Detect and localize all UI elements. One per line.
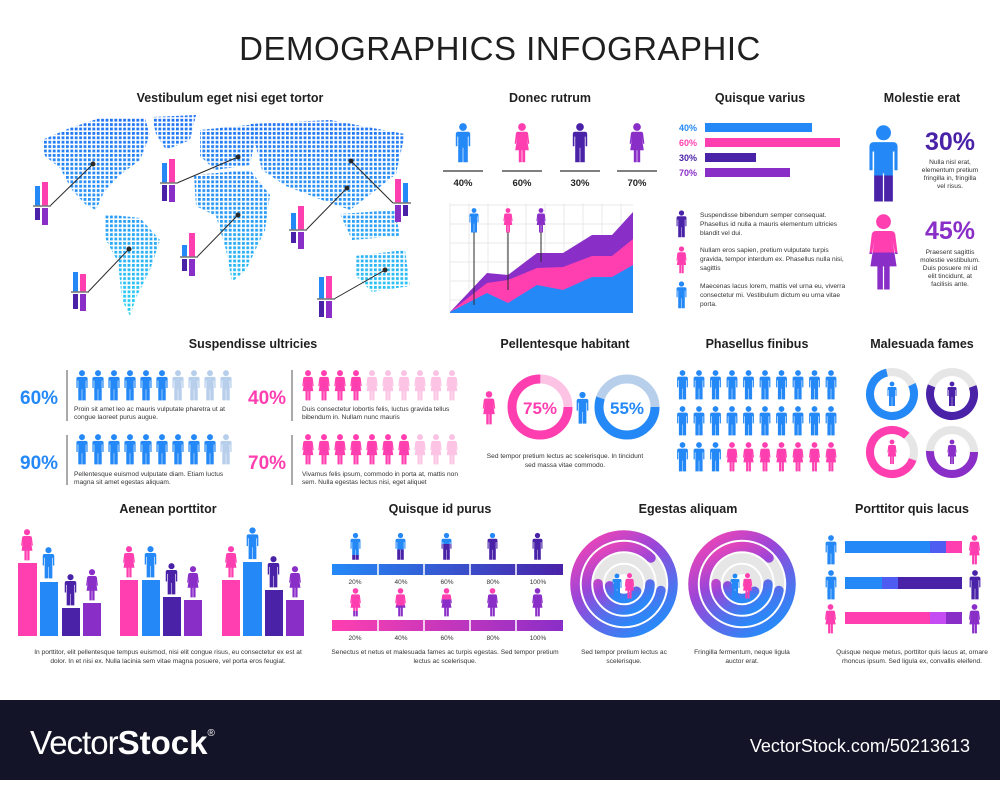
legend text items: Maecenas lacus lorem, mattis vel urna eu, viverra — [700, 283, 845, 290]
area chart — [450, 203, 633, 313]
legend text items: Phasellus id nulla a mauris elementum ultricies — [700, 221, 838, 228]
row 60% men: Proin sit amet leo ac mauris vulputate pharetra ut at — [74, 406, 225, 413]
women progress row: 100% — [530, 635, 547, 642]
panel: Porttitor quis lacus — [825, 502, 988, 665]
men progress row: 100% — [530, 579, 547, 586]
panel: Molestie erat: elementum pretium — [922, 167, 979, 174]
heading: Quisque id purus — [389, 502, 491, 516]
figures with percentages: 70% — [627, 178, 647, 189]
panel: Porttitor quis lacus: Quisque neque metus, porttitor quis lacus at, ornare — [836, 649, 988, 656]
legend text items: gravida, tempor interdum ex. Phasellus nulla nisi, — [700, 256, 844, 263]
men progress row: 80% — [486, 579, 500, 586]
panel: Molestie erat: facilisis ante. — [931, 281, 969, 288]
panel: Malesuada fames — [863, 337, 980, 480]
figures with percentages: 30% — [570, 178, 590, 189]
heading: Porttitor quis lacus — [855, 502, 969, 516]
women progress row: 60% — [440, 635, 454, 642]
panel: Egestas aliquam — [575, 502, 791, 665]
panel: Molestie erat: fringilla in, fringilla — [924, 175, 977, 182]
panel: Porttitor quis lacus: rhoncus ipsum. Sed ligula ex, convallis eleifend. — [842, 658, 982, 665]
panel: Molestie erat: 30% — [925, 128, 975, 156]
legend text items: Nullam eros sapien, pretium vulputate turpis — [700, 247, 829, 254]
men progress row — [332, 533, 563, 586]
row 40% women: Duis consectetur lobortis felis, luctus gravida tellus — [302, 406, 450, 413]
donut 55%: 55% — [610, 399, 644, 418]
panel: Phasellus finibus — [677, 337, 837, 471]
panel: Egestas aliquam: auctor erat. — [725, 658, 759, 665]
panel: Aenean porttitor: dolor. In et nisi ex. Nulla lacinia sem vitae magna posuere, vel porta eros feugiat. — [50, 658, 286, 665]
legend text items: porta. — [700, 301, 717, 308]
horizontal bar chart — [679, 123, 840, 178]
panel: Quisque varius — [676, 91, 845, 308]
heading: Molestie erat: Molestie erat — [884, 91, 961, 105]
legend text items: Suspendisse bibendum semper consequat. — [700, 212, 827, 219]
row 70% women: sem. Nulla egestas lectus nisi, eget aliquet — [302, 479, 427, 486]
footer banner: VectorStock.com/50213613 — [750, 736, 970, 756]
panel: world map — [33, 91, 415, 322]
panel: Molestie erat: vel risus. — [937, 183, 963, 190]
people grid — [677, 370, 836, 471]
row 90% men: 90% — [20, 453, 58, 474]
horizontal bar chart: 40% — [679, 123, 697, 133]
row 40% women: bibendum in. Nullam nunc mauris — [302, 414, 401, 421]
legend text items: blandit vel dui. — [700, 230, 742, 237]
legend text items — [676, 210, 845, 308]
radial chart 1 — [575, 535, 673, 633]
heading: Malesuada fames — [870, 337, 974, 351]
panel: Molestie erat: 45% — [925, 217, 975, 245]
heading: Egestas aliquam — [639, 502, 737, 516]
panel: Quisque id purus: lectus ac scelerisque. — [413, 658, 477, 665]
women progress row — [332, 588, 563, 642]
men progress row: 20% — [348, 579, 362, 586]
panel: Quisque id purus: Senectus et netus et malesuada fames ac turpis egestas. Sed tempor pretium — [331, 649, 559, 656]
row 70% women: 70% — [248, 453, 286, 474]
row 60% men — [20, 370, 232, 421]
footer banner: ® — [207, 728, 215, 739]
women progress row: 80% — [486, 635, 500, 642]
legend text items: sagittis — [700, 265, 721, 272]
panel: Molestie erat: elit tincidunt, at — [928, 273, 972, 280]
panel: Molestie erat: Praesent sagittis — [926, 249, 975, 256]
map callouts — [50, 155, 393, 299]
panel: Aenean porttitor: In porttitor, elit pellentesque tempus euismod, nisi elit congue risus, eu consectetur ex est at — [34, 649, 302, 656]
man 30% — [869, 125, 898, 201]
row 70% women — [248, 434, 458, 486]
bar chart with figures — [18, 527, 304, 636]
heading: Suspendisse ultricies — [189, 337, 317, 351]
men progress row: 40% — [394, 579, 408, 586]
panel: Molestie erat — [869, 91, 980, 289]
radial chart 2 — [693, 535, 791, 633]
donut 75% — [483, 379, 568, 435]
woman 45% — [869, 214, 898, 289]
women progress row: 40% — [394, 635, 408, 642]
panel: Pellentesque habitant: sed massa vitae commodo. — [525, 462, 605, 469]
horizontal bar chart: 30% — [679, 153, 697, 163]
panel: Suspendisse ultricies — [20, 337, 458, 486]
panel: Molestie erat: Duis posuere mi id — [923, 265, 978, 272]
panel: Molestie erat: molestie vestibulum. — [920, 257, 980, 264]
horizontal bar chart: 60% — [679, 138, 697, 148]
row 70% women: Vivamus felis ipsum, commodo in porta at, mattis non — [302, 471, 458, 478]
dotted world map — [35, 112, 415, 322]
panel: Donec rutrum — [443, 91, 657, 313]
panel: Egestas aliquam: scelerisque. — [606, 658, 642, 665]
heading: map: Vestibulum eget nisi eget tortor — [137, 91, 324, 105]
panel: Quisque id purus — [331, 502, 563, 665]
row 90% men — [20, 434, 232, 486]
horizontal bar chart: 70% — [679, 168, 697, 178]
heading: Donec rutrum: Donec rutrum — [509, 91, 591, 105]
heading: Phasellus finibus — [706, 337, 808, 351]
ring charts — [863, 365, 980, 480]
heading: Quisque varius: Quisque varius — [715, 91, 805, 105]
row 60% men: 60% — [20, 388, 58, 409]
row 40% women — [248, 370, 458, 421]
panel: Molestie erat: Nulla nisl erat, — [929, 159, 971, 166]
women progress row: 20% — [348, 635, 362, 642]
figures with percentages: 40% — [453, 178, 473, 189]
row 40% women: 40% — [248, 388, 286, 409]
figures with percentages — [443, 123, 657, 189]
panel: Aenean porttitor — [18, 502, 304, 665]
row 90% men: magna sit amet egestas aliquam. — [74, 479, 171, 486]
row 90% men: Pellentesque euismod vulputate diam. Etiam luctus — [74, 471, 224, 478]
panel: Egestas aliquam: Fringilla fermentum, neque ligula — [694, 649, 790, 656]
donut 75%: 75% — [523, 399, 557, 418]
footer banner: VectorStock — [30, 724, 207, 761]
heading: Aenean porttitor — [119, 502, 217, 516]
heading: Pellentesque habitant — [500, 337, 630, 351]
panel: Egestas aliquam: Sed tempor pretium lectus ac — [581, 649, 668, 656]
panel: Pellentesque habitant — [483, 337, 655, 469]
figures with percentages: 60% — [512, 178, 532, 189]
stacked bars — [825, 535, 980, 633]
men progress row: 60% — [440, 579, 454, 586]
donut 55% — [577, 379, 655, 435]
row 60% men: congue laoreet purus augue. — [74, 414, 158, 421]
legend text items: consectetur mi. Vestibulum dictum eu urna vitae — [700, 292, 840, 299]
panel: Pellentesque habitant: Sed tempor pretium lectus ac scelerisque. In tincidunt — [487, 453, 643, 460]
title: DEMOGRAPHICS INFOGRAPHIC — [239, 30, 761, 67]
footer banner — [0, 700, 1000, 780]
